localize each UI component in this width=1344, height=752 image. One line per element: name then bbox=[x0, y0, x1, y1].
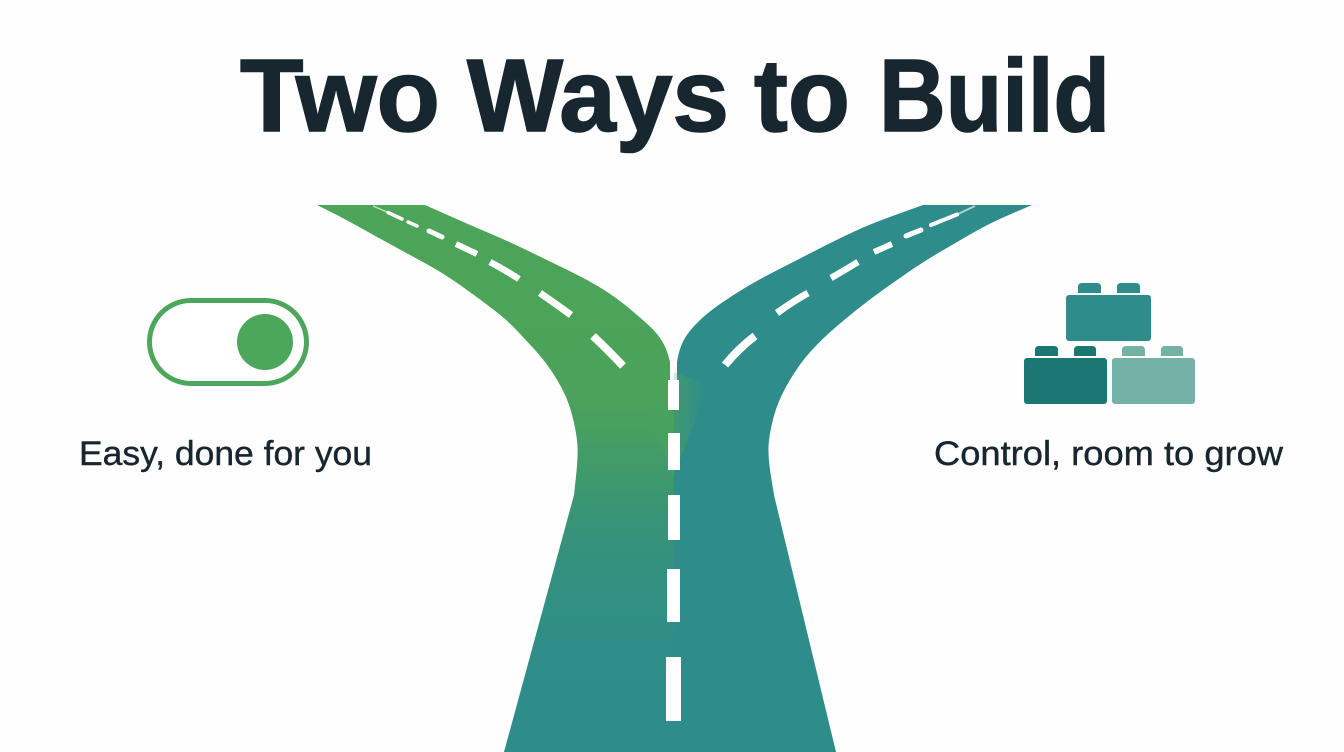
label: control: Control, room to grow bbox=[934, 435, 1283, 473]
title: Build bbox=[879, 38, 1110, 153]
title bbox=[240, 38, 1110, 153]
top block bbox=[1066, 283, 1151, 341]
icon: stacked building blocks bbox=[1024, 283, 1195, 404]
label: easy: Easy, done for you bbox=[79, 435, 372, 473]
road: left green branch and trunk bbox=[317, 205, 674, 752]
bottom-right block bbox=[1112, 346, 1195, 404]
left branch lane dashes bbox=[373, 206, 623, 366]
center lane dashes bbox=[666, 362, 681, 721]
road: right teal branch and trunk bbox=[672, 205, 1032, 752]
road: green merge wedge bbox=[643, 372, 706, 474]
forked road illustration bbox=[317, 205, 1032, 752]
title: Ways bbox=[467, 38, 729, 153]
bottom-left block bbox=[1024, 346, 1107, 404]
title: to bbox=[754, 38, 850, 153]
right branch lane dashes bbox=[725, 206, 975, 365]
title: Two bbox=[240, 38, 440, 153]
icon: toggle switch bbox=[150, 300, 306, 384]
